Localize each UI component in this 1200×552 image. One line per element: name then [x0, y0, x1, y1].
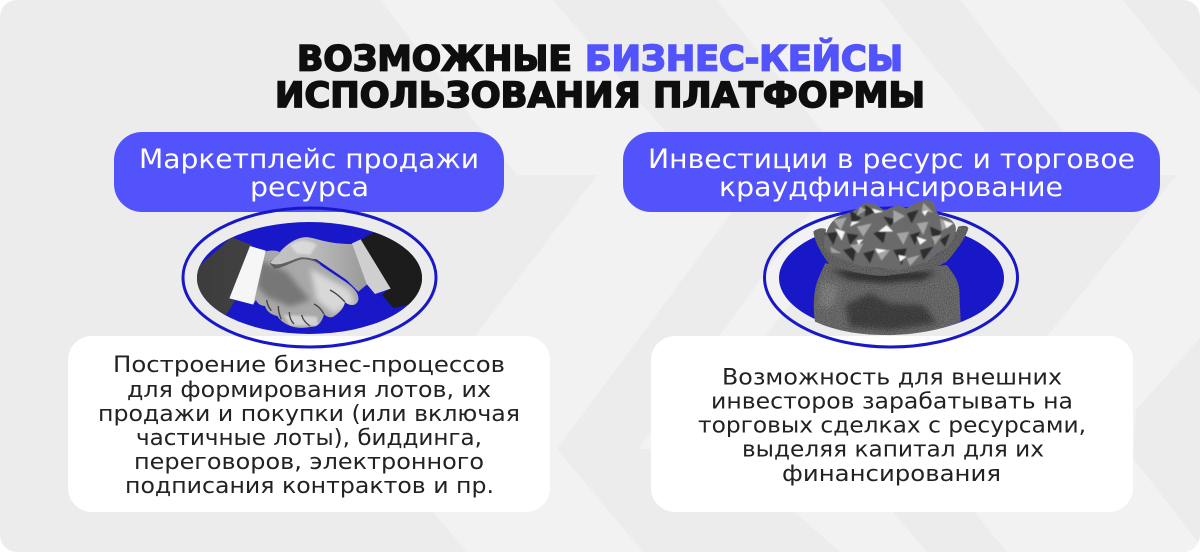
icon: sack of diamonds in blue ellipse [764, 197, 1018, 347]
panel: left text card: частичные лоты), биддинга, [136, 426, 482, 451]
panel: left text card: продажи и покупки (или включая [98, 402, 520, 427]
panel: right text card: инвесторов зарабатывать на [711, 390, 1073, 414]
title [275, 38, 925, 116]
icon part: diamonds [824, 200, 956, 270]
panel: left heading pill [114, 132, 504, 212]
panel: right text card: торговых сделках с ресурсами, [698, 414, 1086, 438]
panel: right heading pill: краудфинансирование [719, 172, 1063, 203]
panel: right text card: выделяя капитал для их [742, 438, 1044, 462]
icon part: sack body [813, 226, 968, 335]
title: ВОЗМОЖНЫЕ [297, 40, 572, 80]
panel: left heading pill: Маркетплейс продажи [139, 144, 479, 175]
icon: handshake in blue ellipse [183, 208, 436, 347]
panel: right text card [651, 336, 1133, 512]
panel: left heading pill: ресурса [250, 172, 369, 203]
title: БИЗНЕС-КЕЙСЫ [585, 38, 903, 80]
panel: left text card: для формирования лотов, их [127, 378, 491, 403]
panel: left text card: подписания контрактов и пр. [125, 474, 494, 499]
panel: left text card: Построение бизнес-процессов [113, 353, 505, 378]
panel: right text card: Возможность для внешних [722, 366, 1062, 390]
panel: right text card: финансирования [782, 462, 1001, 487]
panel: right heading pill: Инвестиции в ресурс и торговое [648, 144, 1135, 175]
panel: right heading pill [623, 132, 1160, 212]
title: ИСПОЛЬЗОВАНИЯ ПЛАТФОРМЫ [275, 76, 925, 116]
panel: left text card: переговоров, электронного [134, 450, 484, 475]
panel: left text card [68, 336, 550, 512]
